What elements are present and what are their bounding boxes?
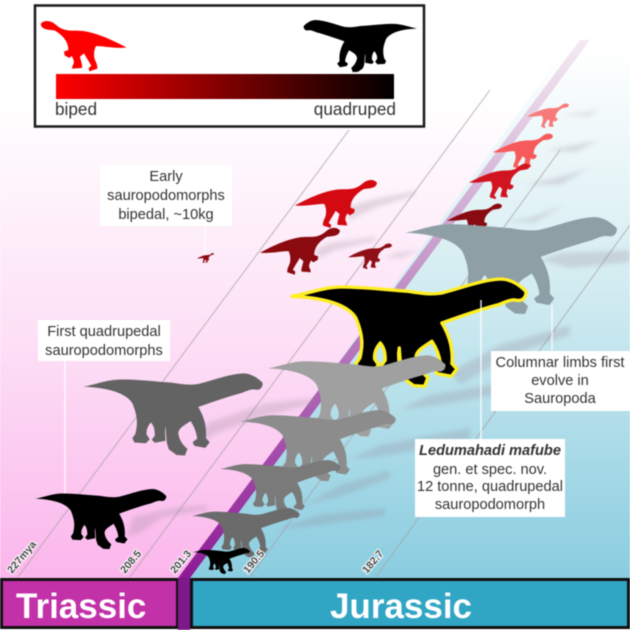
dinosaur: blue-grey sauropod [405,217,617,314]
callout: columnar limbs [491,351,630,411]
callout: Ledumahadi mafube: sauropodomorph [435,497,545,513]
legend label: quadruped: quadruped [314,99,396,119]
timeline date labels: 201.3 [168,548,194,576]
callout: early sauropodomorphs: bipedal, ~10kg [118,207,214,223]
dinosaur: small black quadruped [193,548,250,574]
legend icon: black quadruped [304,20,417,72]
dinosaur: first black quadruped [35,489,166,549]
legend gradient bar [56,74,394,99]
timeline date labels: 208.5 [118,548,144,576]
timeline lines [18,90,630,577]
dinosaur: tiny early sauropodomorph [197,253,214,263]
timeline date labels: 182.7 [360,548,386,576]
callout: columnar limbs: Sauropoda [524,391,597,407]
callout: columnar limbs: evolve in [531,373,589,389]
dinosaur: red biped, second [493,134,553,169]
timeline date labels: 227mya [5,539,39,576]
legend label: biped: biped [55,99,97,119]
period bar: Triassic: Triassic [16,587,146,626]
callout: early sauropodomorphs: sauropodomorphs [107,188,225,204]
callout: first quadrupedal: First quadrupedal [47,324,161,340]
dinosaur: Ledumahadi highlighted in yellow [292,279,526,386]
callout: first quadrupedal: sauropodomorphs [45,343,163,359]
dinosaur: large grey quadruped [83,373,263,456]
period bar: Triassic [2,580,178,628]
dinosaur shadows [127,108,630,537]
period bar: Jurassic: Jurassic [330,587,472,626]
callout: early sauropodomorphs [100,165,232,226]
dinosaur: dark red biped [260,228,340,275]
Triassic-Jurassic boundary band [178,40,590,578]
timeline date labels [5,539,386,576]
period bar: Jurassic [192,580,628,628]
dinosaur: dark red biped, fourth [447,204,502,236]
dinosaur: grey quadruped 3 [220,460,340,515]
dinosaur: red biped, upper right [527,103,569,128]
callout: Ledumahadi mafube: Ledumahadi mafube [419,443,561,459]
timeline date labels: 190.5 [241,548,267,576]
legend box [35,6,424,126]
legend icon: red biped [41,21,127,71]
dinosaur: large red biped [295,180,377,228]
callout: columnar limbs: Columnar limbs first [496,355,624,371]
callout leader: Ledumahadi [480,300,482,439]
callout: early sauropodomorphs: Early [149,169,183,185]
background: Jurassic blue zone [183,0,630,578]
callout leader lines [65,225,552,495]
dinosaur: red biped, third [469,164,530,199]
callout: Ledumahadi mafube: gen. et spec. nov. [433,462,547,478]
callout: Ledumahadi mafube: 12 tonne, quadrupedal [417,479,563,495]
dinosaur: grey quadruped 1 [268,355,446,437]
period bar: boundary [178,578,190,630]
dinosaur: grey quadruped 4 [192,508,300,557]
dinosaur: small dark red biped [348,244,392,269]
callout: Ledumahadi mafube [415,439,565,517]
dinosaur: grey quadruped 2 [240,410,396,481]
callout: first quadrupedal [38,320,170,361]
